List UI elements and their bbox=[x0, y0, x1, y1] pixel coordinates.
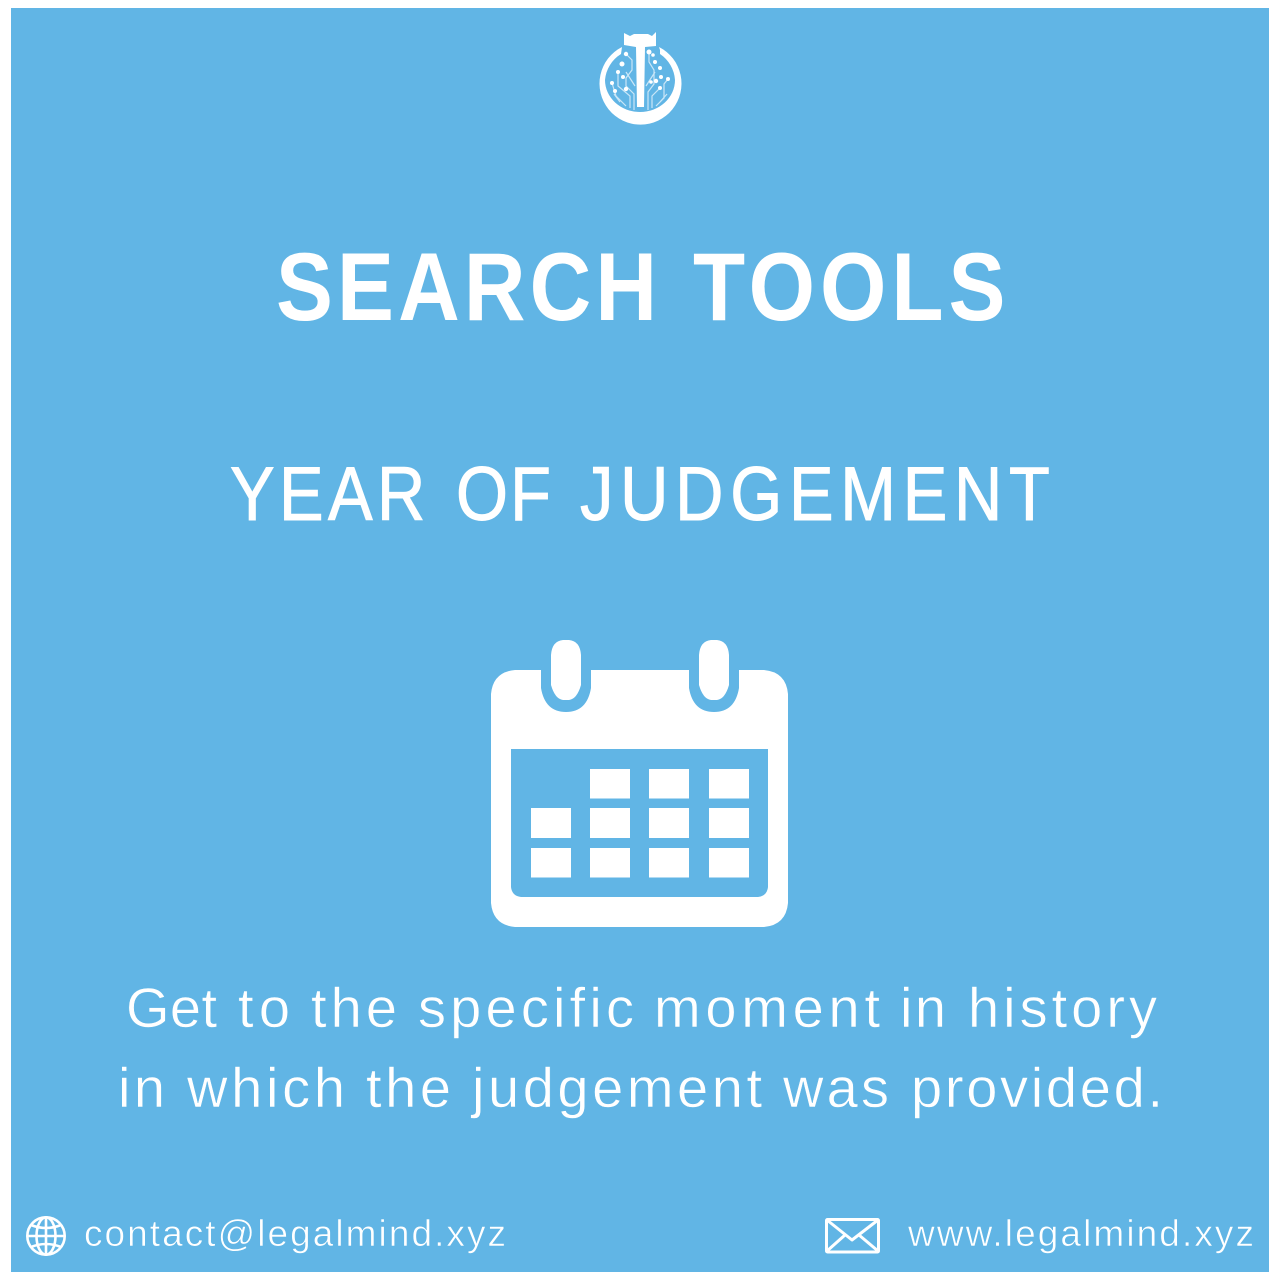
body text: provided. bbox=[911, 1056, 1163, 1119]
icon: calendar bbox=[491, 640, 788, 927]
icon: envelope bbox=[826, 1220, 878, 1252]
body text: in bbox=[900, 976, 946, 1039]
body text: Get bbox=[126, 976, 217, 1039]
body text: in bbox=[118, 1056, 165, 1119]
calendar ring left bbox=[551, 640, 581, 700]
subtitle bbox=[230, 452, 1050, 537]
icon: globe bbox=[27, 1217, 65, 1255]
body text: which bbox=[186, 1056, 345, 1119]
body text: was bbox=[782, 1056, 889, 1119]
contact email: contact@legalmind.xyz bbox=[84, 1213, 506, 1254]
subtitle: OF bbox=[456, 452, 551, 537]
body text bbox=[118, 976, 1163, 1119]
body text: history bbox=[968, 976, 1157, 1039]
body text: to bbox=[238, 976, 290, 1039]
body text: judgement bbox=[470, 1056, 762, 1119]
body text: the bbox=[311, 976, 397, 1039]
body text: moment bbox=[654, 976, 880, 1039]
website url: www.legalmind.xyz bbox=[907, 1213, 1254, 1254]
subtitle: JUDGEMENT bbox=[580, 452, 1050, 537]
calendar day cells bbox=[531, 769, 749, 878]
title: SEARCH bbox=[276, 233, 657, 341]
body text: the bbox=[366, 1056, 451, 1119]
title: TOOLS bbox=[693, 233, 1005, 341]
body text: specific bbox=[418, 976, 634, 1039]
subtitle: YEAR bbox=[230, 452, 425, 537]
icon: legal mind logo bbox=[599, 32, 681, 125]
calendar ring right bbox=[699, 640, 729, 700]
title bbox=[276, 233, 1005, 341]
